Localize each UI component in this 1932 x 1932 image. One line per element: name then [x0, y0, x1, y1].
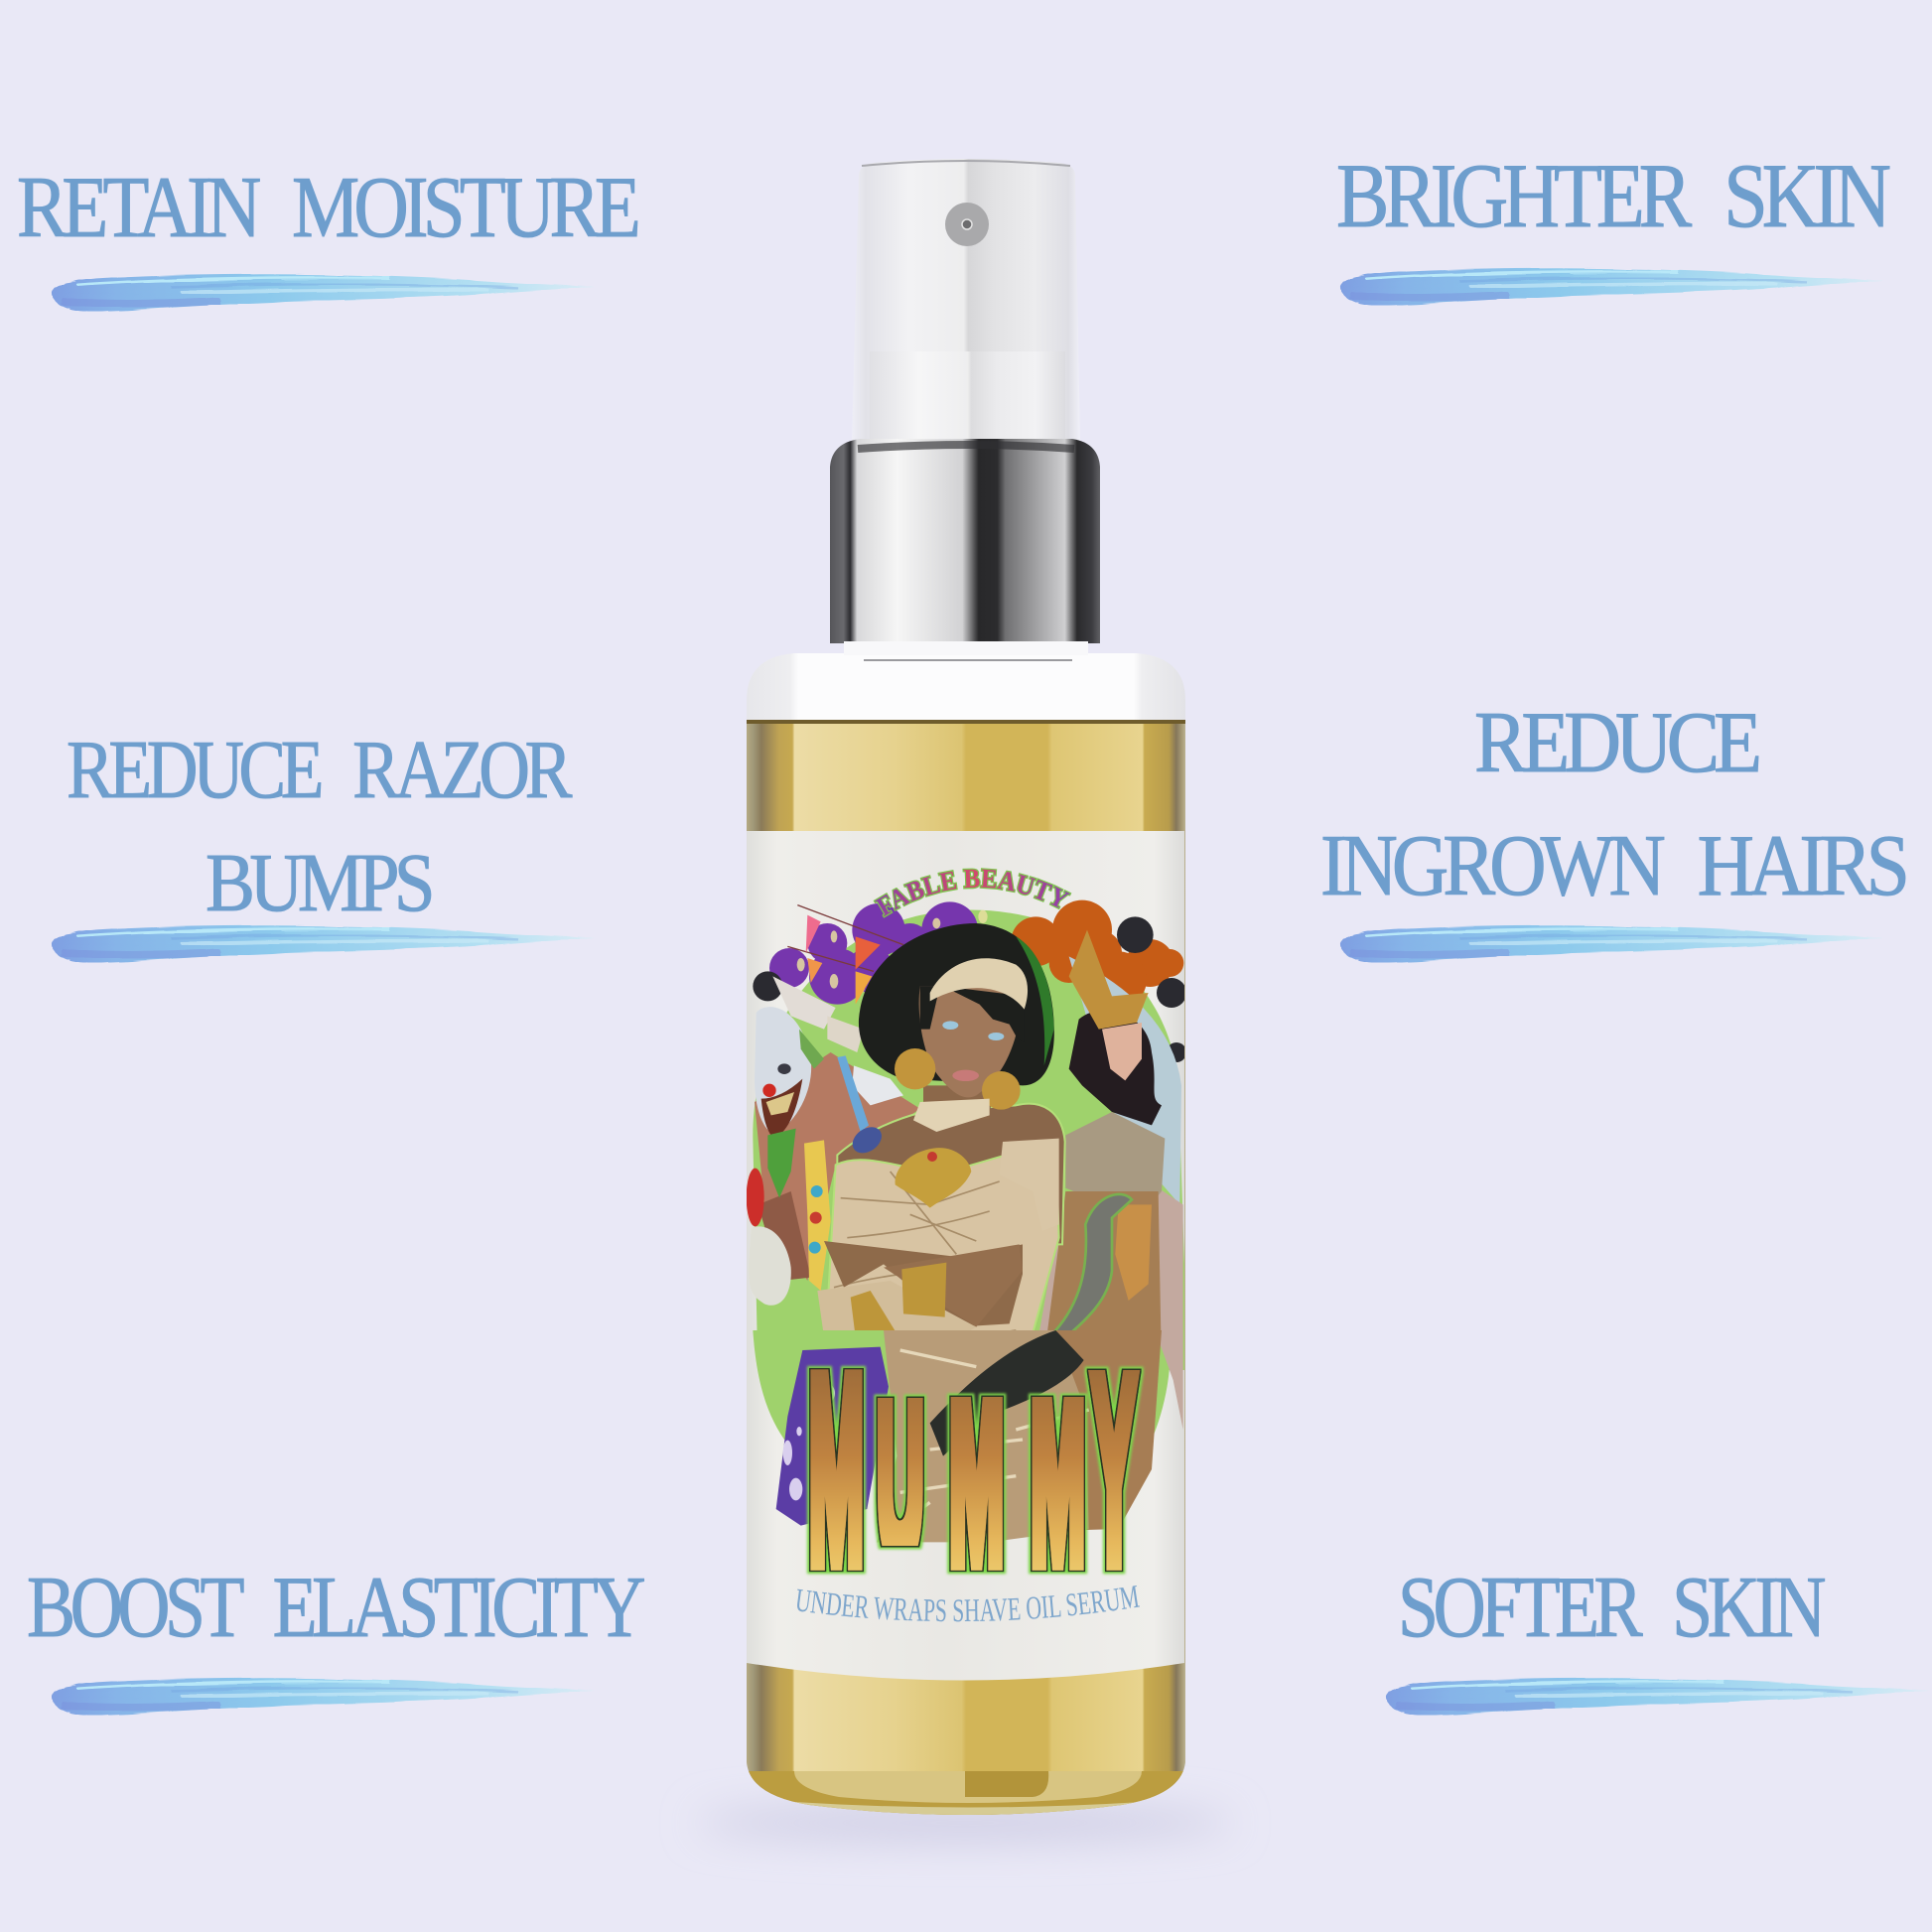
oil fill — [746, 722, 1186, 1824]
shoulders — [837, 1104, 1065, 1244]
neck wrap — [913, 1099, 990, 1132]
mummy figure — [817, 923, 1065, 1370]
subtitle: UNDER WRAPS SHAVE OIL SERUM — [797, 1586, 1140, 1622]
MUMMY title: MUMMY — [809, 1326, 1136, 1614]
brush stroke — [52, 274, 596, 312]
brush stroke — [1386, 1678, 1930, 1716]
gold bracers — [901, 1263, 946, 1317]
brush stroke — [52, 1678, 596, 1716]
benefit: softer skin — [1386, 1560, 1930, 1716]
purple balloons — [769, 901, 978, 1005]
lips — [952, 1070, 979, 1081]
tie — [804, 1140, 831, 1291]
neck — [923, 1085, 993, 1125]
red ball — [747, 1169, 764, 1226]
balloon highlights — [797, 910, 988, 994]
FABLE BEAUTY logo: FABLE BEAUTY — [874, 868, 1072, 918]
oil base — [749, 1771, 1183, 1815]
bottle shadow — [697, 1805, 1233, 1841]
heading: retain moisture: RETAIN MOISTURE — [17, 160, 637, 256]
angel wings — [1069, 956, 1181, 1204]
metal collar — [830, 439, 1100, 643]
label illustration — [747, 868, 1184, 1622]
brush stroke — [52, 925, 596, 963]
torso wraps — [824, 1145, 1059, 1370]
clear cap — [852, 159, 1080, 443]
fringe — [943, 986, 1025, 1042]
snake — [1055, 1194, 1132, 1340]
purple robe — [776, 1347, 889, 1526]
benefit: boost elasticity — [27, 1560, 644, 1716]
suspender — [837, 1055, 869, 1132]
angel figure — [1047, 930, 1166, 1330]
label — [747, 831, 1184, 1680]
brush stroke — [1340, 925, 1884, 963]
collar ruffle — [852, 1065, 903, 1105]
benefit: reduce ingrown hairs — [1320, 695, 1905, 963]
heading: reduce ingrown hairs: REDUCE — [1474, 695, 1759, 791]
clown figure — [747, 976, 920, 1306]
bunting flags — [787, 905, 903, 1005]
black balloons — [753, 916, 1186, 1062]
knife — [772, 976, 836, 1030]
green backdrop lower — [753, 1330, 1170, 1440]
spray bottle — [747, 159, 1185, 1815]
headband — [930, 958, 1028, 1010]
eyes — [942, 1021, 958, 1030]
bottle body — [746, 645, 1186, 1827]
nozzle — [945, 203, 989, 246]
beetle — [848, 1122, 887, 1159]
benefit: retain moisture — [17, 160, 637, 312]
right wing tip — [1155, 1330, 1183, 1430]
snake coil — [930, 1330, 1084, 1456]
benefit: brighter skin — [1336, 145, 1890, 306]
heading: reduce razor bumps: BUMPS — [206, 837, 431, 929]
benefit: reduce razor bumps — [52, 724, 596, 963]
gold scarab — [896, 1148, 971, 1208]
glove — [749, 1226, 791, 1306]
green backdrop — [753, 910, 1188, 1370]
helmet wing — [1069, 930, 1149, 1030]
lower body wraps — [877, 1330, 1089, 1542]
heading: softer skin: SOFTER SKIN — [1398, 1560, 1825, 1656]
clown face — [755, 1007, 811, 1135]
heading: boost elasticity: BOOST ELASTICITY — [27, 1560, 644, 1656]
lower skirt — [1010, 1330, 1162, 1532]
crossed arms — [824, 1241, 1023, 1327]
orange balloons — [1013, 899, 1183, 995]
hair — [859, 923, 1054, 1085]
face — [919, 986, 1023, 1097]
brush stroke — [1340, 268, 1884, 306]
heading: reduce razor bumps: REDUCE RAZOR — [67, 724, 572, 816]
earrings — [895, 1048, 935, 1089]
armor — [1065, 1112, 1166, 1195]
pump insert — [870, 351, 1065, 443]
